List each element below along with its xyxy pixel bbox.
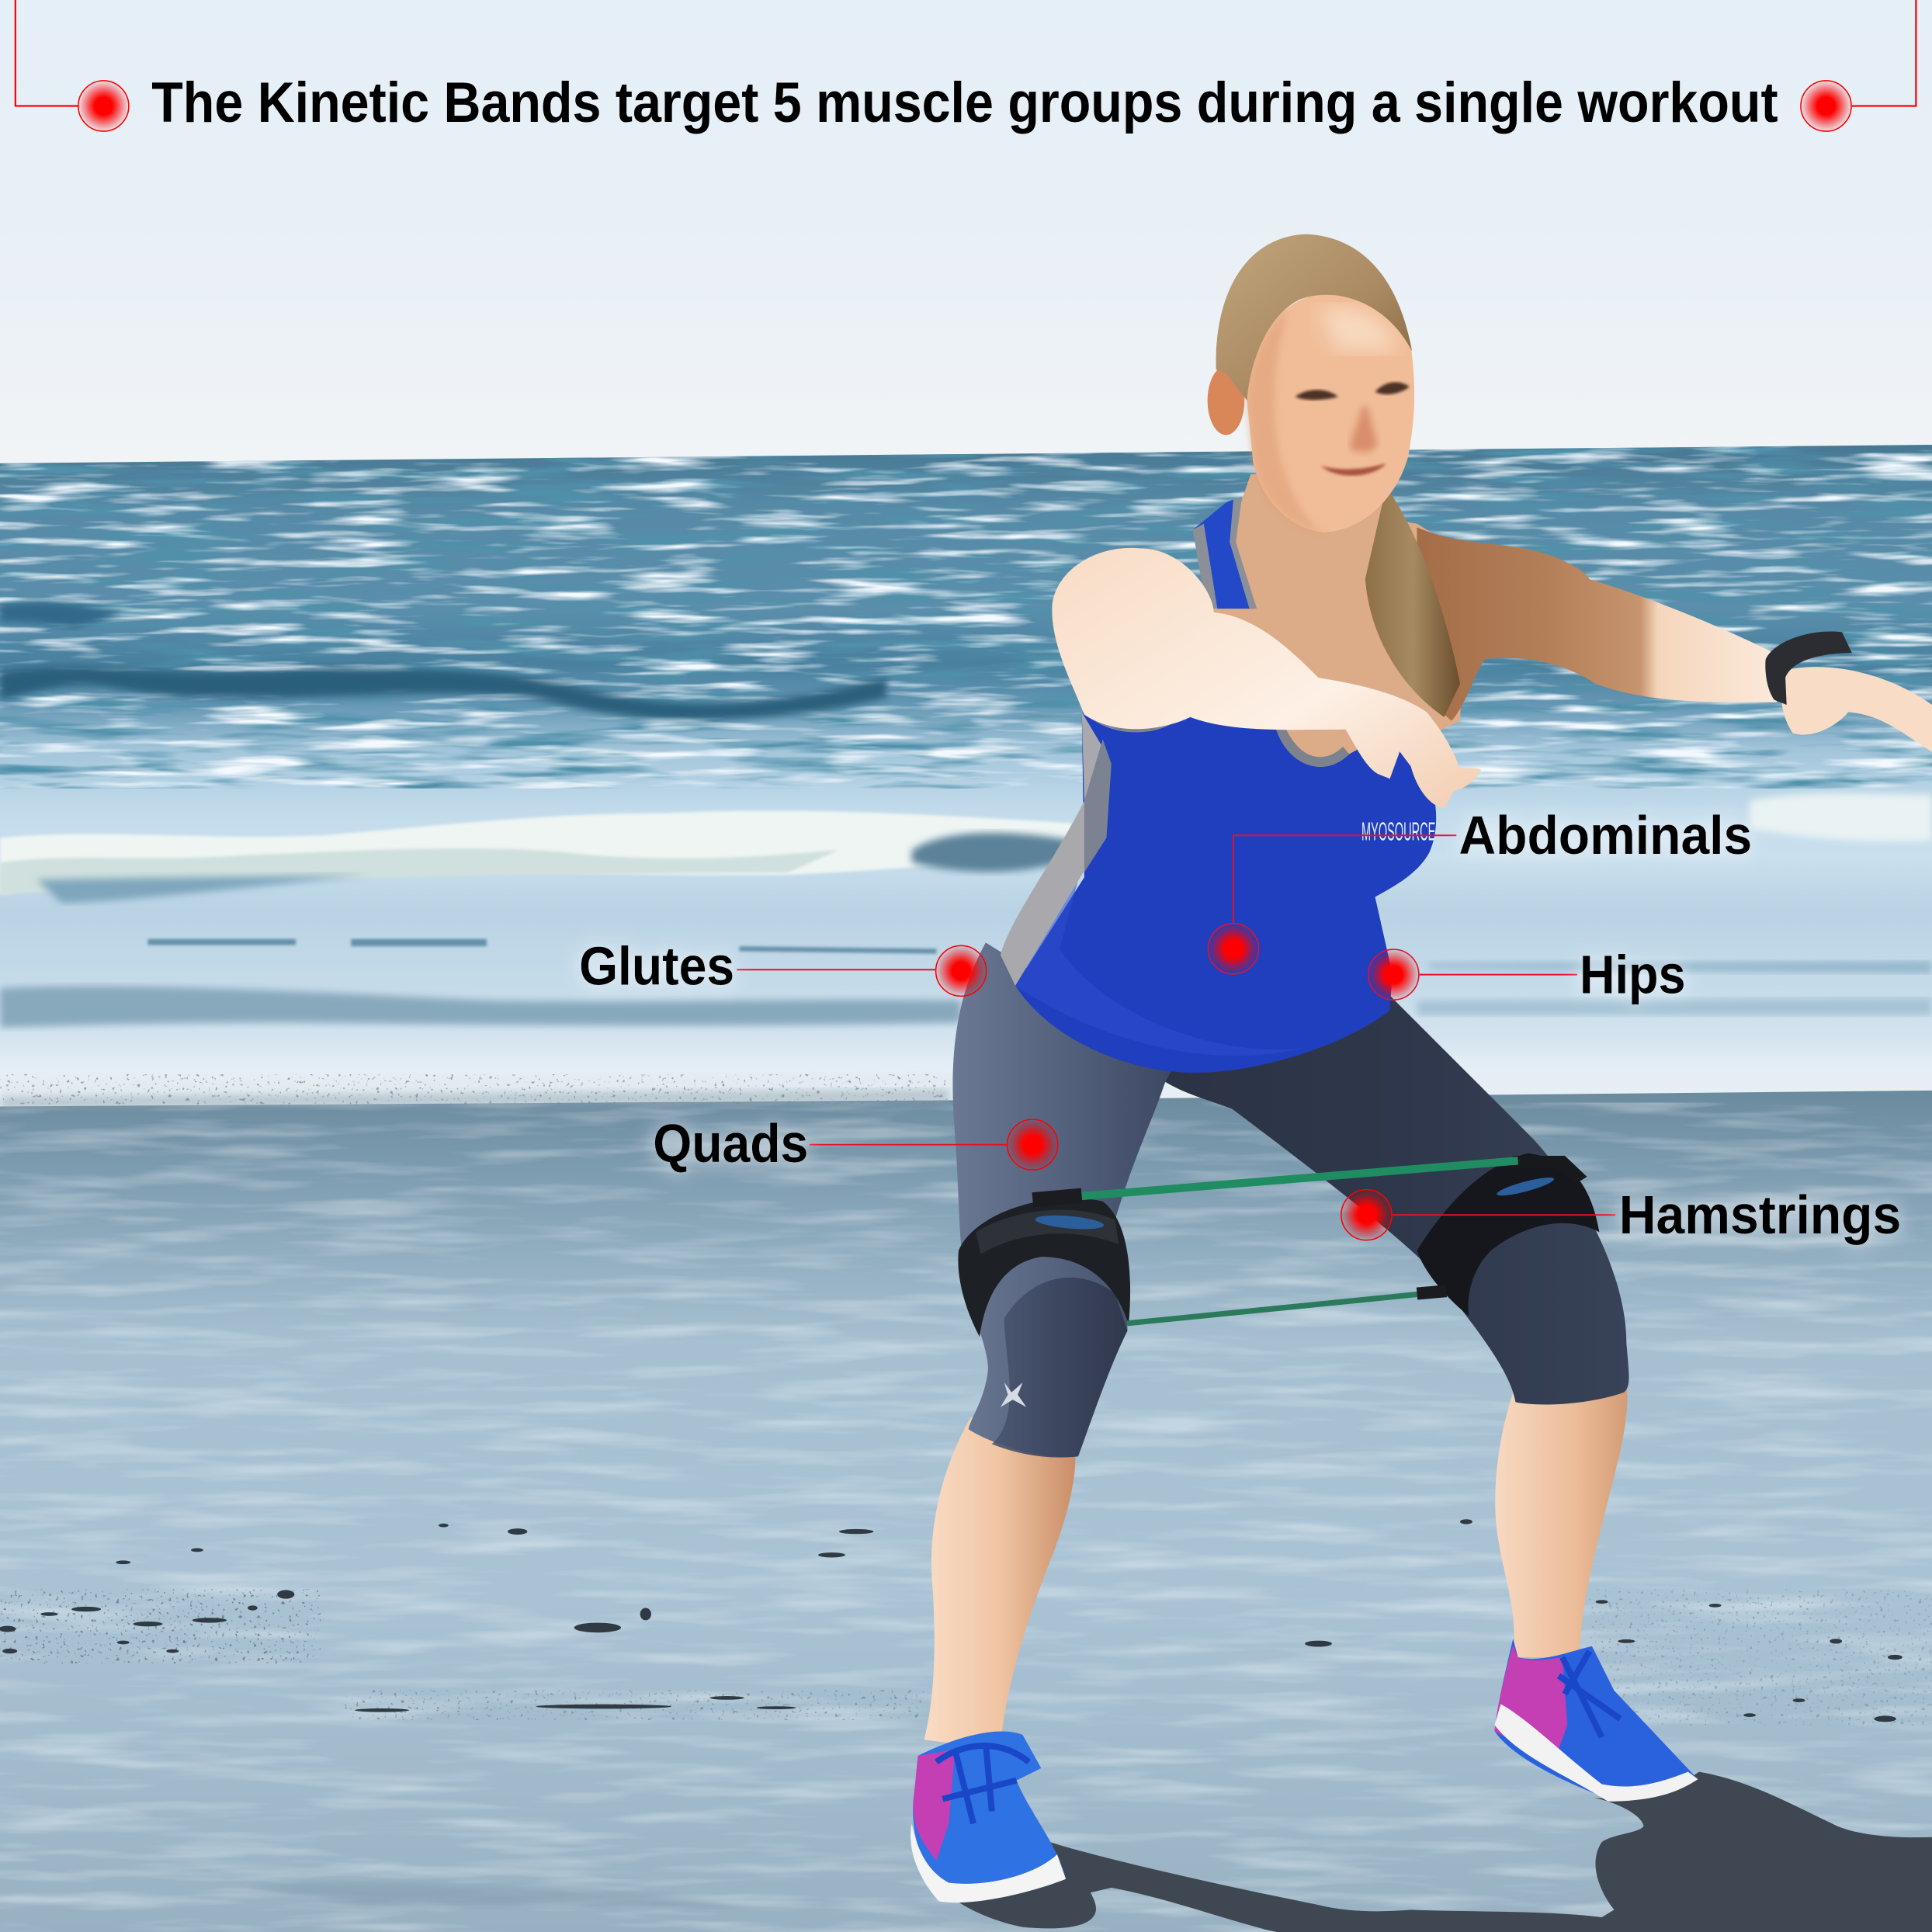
- figure: woman doing band squat: [911, 234, 1932, 1903]
- neck and chest: [1183, 468, 1466, 770]
- tank top: [1001, 705, 1436, 1073]
- right lower leg: [1495, 1386, 1627, 1657]
- pebbles on sand: [0, 1519, 1903, 1722]
- cast shadow on sand: [957, 1772, 1932, 1932]
- callout: abdominals: [1208, 805, 1752, 974]
- callout: hips: Hips: [1580, 944, 1686, 1004]
- right arm (viewer): [1417, 527, 1777, 721]
- head: [1208, 234, 1414, 532]
- left arm (viewer): [1052, 548, 1481, 808]
- callout: hamstrings: [1341, 1185, 1901, 1245]
- left leggings leg: [952, 942, 1183, 1457]
- callout: glutes: Glutes: [579, 935, 734, 996]
- background: wet sand: [0, 1074, 1932, 1932]
- marker: title left: [78, 81, 129, 131]
- left lower leg: [924, 1417, 1076, 1750]
- callout: quads: [653, 1113, 1058, 1174]
- knee band: right leg: [1417, 1153, 1599, 1316]
- mouth: [1321, 463, 1386, 476]
- top bracket lines: [16, 0, 1916, 106]
- callout: hamstrings: Hamstrings: [1619, 1185, 1901, 1245]
- callout: hips: [1368, 944, 1686, 1004]
- right hand: [1781, 667, 1932, 751]
- callout: abdominals: Abdominals: [1459, 805, 1752, 865]
- right shoe: [1494, 1639, 1698, 1802]
- title: The Kinetic Bands target 5 muscle groups during a single workout: [151, 71, 1778, 134]
- resistance bands: [1032, 1160, 1518, 1323]
- left shoe: [911, 1732, 1066, 1903]
- smartwatch: [1765, 631, 1852, 705]
- callout: glutes: [579, 935, 987, 996]
- background: sky: [0, 0, 1932, 468]
- ponytail: [1365, 487, 1460, 717]
- eyes: [1295, 390, 1338, 400]
- left lower knee shading: [992, 1278, 1127, 1458]
- marker: title right: [1801, 81, 1851, 131]
- legging logo: [1001, 1382, 1026, 1407]
- callout: quads: Quads: [653, 1113, 808, 1174]
- background: sea and surf: [0, 443, 1932, 1109]
- left shoulder strap of tank: [1193, 499, 1254, 609]
- hair: [1216, 234, 1412, 401]
- right leggings leg: [1139, 961, 1629, 1404]
- figure: woman doing band squat: MYOSOURCE: [1361, 818, 1435, 847]
- knee band: left leg: [958, 1198, 1130, 1337]
